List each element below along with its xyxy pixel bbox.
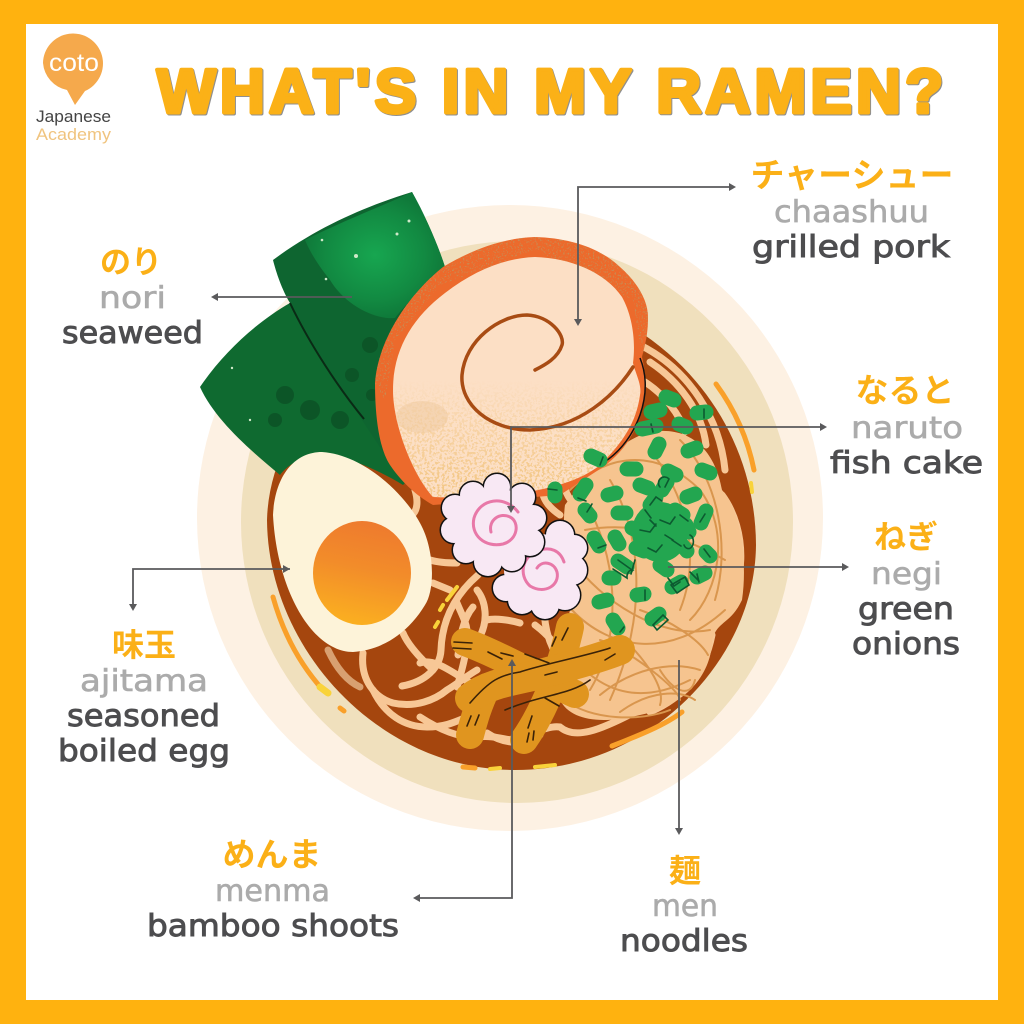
nori: lower sheet: [200, 303, 410, 485]
central onion cluster: [632, 482, 689, 570]
label: menma: menma: [215, 874, 330, 909]
label: men: 麺: [669, 853, 701, 889]
label: nori: seaweed: [62, 316, 203, 351]
label: chaashuu: chaashuu: [774, 195, 929, 230]
onion dark outlines: [548, 409, 710, 632]
naruto fish cakes: [441, 474, 587, 619]
pork tan smudge: [396, 401, 448, 433]
chashu pork: [375, 237, 650, 505]
egg yolk: [313, 521, 411, 625]
label: menma: [147, 659, 516, 944]
label: negi: onions: [852, 627, 960, 662]
label: nori: のり: [100, 245, 162, 280]
label: ajitama: ajitama: [80, 664, 208, 699]
nori: upper sheet: [273, 192, 445, 470]
label: men: men: [652, 889, 718, 924]
naruto: front piece: [441, 474, 546, 576]
nori: bright patch: [305, 192, 445, 318]
logo: Coto Japanese Academy: [36, 34, 112, 144]
nori: fold line: [290, 303, 364, 419]
noodles: thick strands: [328, 345, 741, 742]
noodle mass: [560, 431, 744, 720]
bowl inner rim: [241, 241, 793, 803]
pork outer band: [375, 237, 648, 505]
label: ajitama: 味玉: [112, 627, 176, 663]
menma dark lines: [453, 628, 615, 742]
label: chaashuu: grilled pork: [752, 230, 951, 265]
scattered onion pieces: [555, 397, 710, 628]
menma bamboo shoots: [453, 627, 620, 742]
label: negi: green: [858, 592, 954, 627]
nori seaweed: [200, 192, 445, 485]
label: ajitama: seasoned: [67, 699, 220, 734]
label: naruto: [507, 372, 983, 513]
label: nori: [62, 245, 352, 351]
label: men: [620, 660, 748, 959]
nori: light flecks: [231, 220, 410, 421]
naruto: back piece: [493, 521, 587, 619]
illustration: ramen bowl: [197, 192, 823, 831]
label: negi: [668, 519, 960, 662]
label: naruto: naruto: [851, 411, 963, 446]
bowl outer plate: [197, 205, 823, 831]
yellow broth flecks: [320, 483, 752, 769]
nori: dark speckles: [268, 337, 378, 429]
pork cream interior: [393, 257, 640, 498]
label: menma: めんま: [222, 836, 322, 873]
label: naruto: なると: [856, 372, 954, 409]
label: ajitama: boiled egg: [58, 734, 230, 769]
ajitama egg: [273, 452, 432, 652]
orange rim highlights: [273, 384, 754, 768]
label: negi: ねぎ: [874, 519, 938, 555]
noodle fine strands: [565, 440, 725, 717]
green onions: [548, 397, 710, 632]
title: WHAT'S IN MY RAMEN?: [157, 58, 943, 126]
label: nori: nori: [99, 281, 166, 316]
label: naruto: fish cake: [830, 446, 983, 481]
label: chaashuu: [574, 157, 953, 326]
label: men: noodles: [620, 924, 748, 959]
broth: [267, 290, 756, 770]
pork spiral: [462, 315, 633, 430]
logo: Coto Japanese Academy: coto: [49, 49, 99, 77]
label: menma: bamboo shoots: [147, 909, 399, 944]
pork right edge line: [603, 358, 645, 463]
label: chaashuu: チャーシュー: [751, 157, 953, 195]
logo: Coto Japanese Academy: Academy: [36, 125, 112, 144]
label: negi: negi: [871, 557, 942, 592]
label: ajitama: [58, 565, 290, 769]
title: WHAT'S IN MY RAMEN?: [158, 58, 944, 128]
logo: Coto Japanese Academy: Japanese: [36, 107, 111, 126]
